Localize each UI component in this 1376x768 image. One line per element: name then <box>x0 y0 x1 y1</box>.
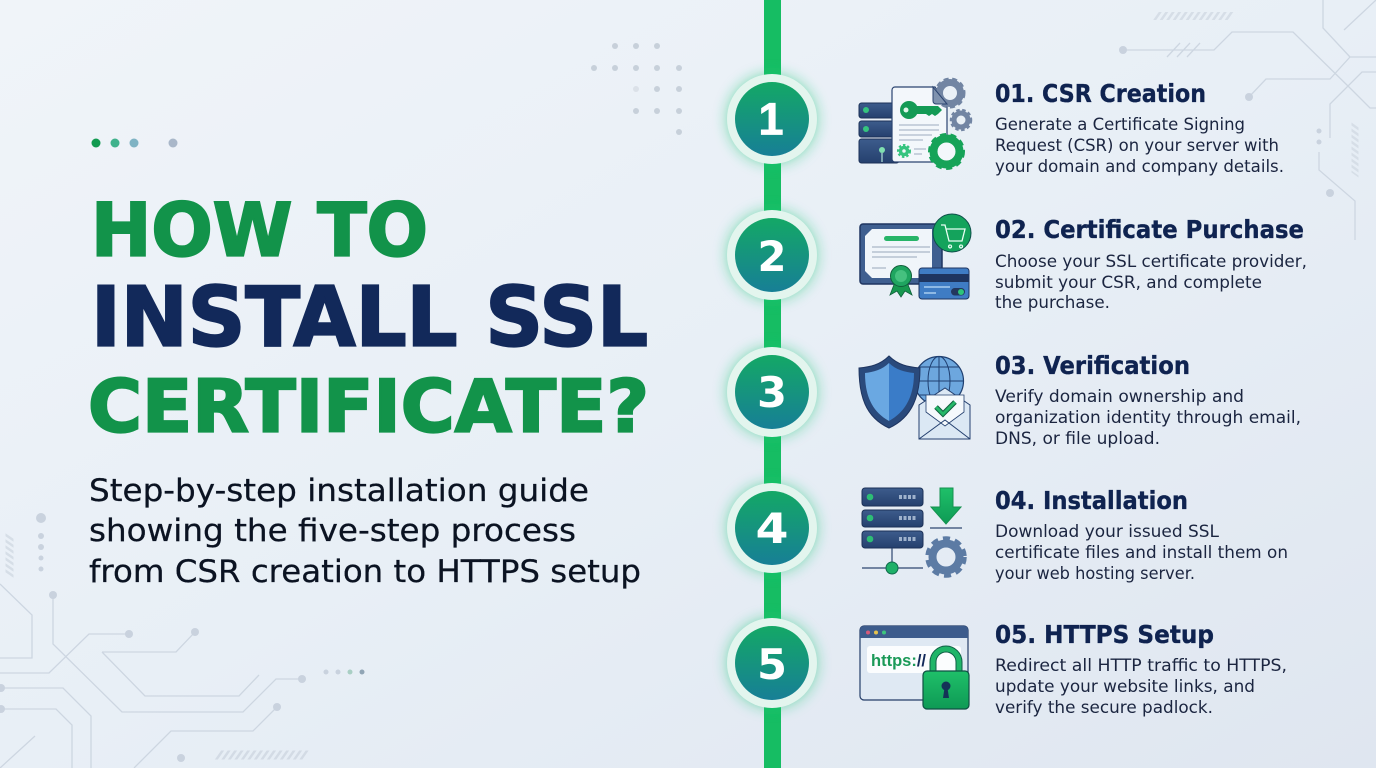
step 4 text: 04. Installation <box>995 486 1188 515</box>
step 1 text: your domain and company details. <box>995 157 1284 177</box>
subtitle: from CSR creation to HTTPS setup <box>89 554 641 590</box>
step 1 text: Request (CSR) on your server with <box>995 136 1279 156</box>
icon: CSR server, document, key and gears <box>859 79 971 168</box>
icon: server, download arrow and gear <box>862 488 964 576</box>
step 5 number <box>727 618 817 708</box>
step 1 number: 1 <box>758 94 784 144</box>
title: CERTIFICATE? <box>88 364 649 448</box>
decoration: top-right circuit <box>1119 0 1376 240</box>
icon: shield, globe and envelope <box>859 356 970 439</box>
icon: browser with https and padlock <box>860 626 969 709</box>
accent dots <box>92 138 178 148</box>
step 2 text: the purchase. <box>995 293 1110 313</box>
title <box>88 188 649 448</box>
step 1 text: Generate a Certificate Signing <box>995 115 1245 135</box>
step 2 number: 2 <box>758 232 786 281</box>
step 5 text <box>995 620 1287 718</box>
step 5 text: update your website links, and <box>995 677 1255 697</box>
step 3 text: organization identity through email, <box>995 408 1301 428</box>
step 4 text: your web hosting server. <box>995 564 1195 584</box>
step 4 number: 4 <box>756 504 788 553</box>
step 1 text: 01. CSR Creation <box>995 79 1206 108</box>
step 1 text <box>995 79 1284 177</box>
step 1 number <box>727 74 817 164</box>
timeline line <box>764 0 781 768</box>
step 3 text <box>995 351 1301 449</box>
subtitle <box>89 473 641 590</box>
step 5 text: Redirect all HTTP traffic to HTTPS, <box>995 656 1287 676</box>
step 4 number <box>727 483 817 573</box>
icon: certificate, cart and card <box>860 214 971 299</box>
icon: browser with https and padlock: https:// <box>871 651 926 670</box>
step 5 text: 05. HTTPS Setup <box>995 620 1214 649</box>
step 4 text: certificate files and install them on <box>995 543 1288 563</box>
step 2 text <box>995 215 1307 313</box>
title: INSTALL SSL <box>91 270 648 366</box>
subtitle: Step-by-step installation guide <box>89 473 589 509</box>
title: HOW TO <box>91 188 428 274</box>
decoration: bottom-left circuit <box>0 0 364 768</box>
step 4 text <box>995 486 1288 584</box>
step 2 text: 02. Certificate Purchase <box>995 215 1304 244</box>
step 3 text: 03. Verification <box>995 351 1190 380</box>
step 3 number: 3 <box>757 368 787 417</box>
step 2 number <box>727 210 817 300</box>
decoration: dot grid <box>591 43 682 135</box>
step 3 text: DNS, or file upload. <box>995 429 1160 449</box>
step 5 number: 5 <box>757 640 787 689</box>
step 2 text: Choose your SSL certificate provider, <box>995 252 1307 272</box>
step 5 text: verify the secure padlock. <box>995 698 1213 718</box>
step 2 text: submit your CSR, and complete <box>995 273 1262 293</box>
step 3 number <box>727 347 817 437</box>
subtitle: showing the five-step process <box>89 513 576 549</box>
step 3 text: Verify domain ownership and <box>995 387 1244 407</box>
step 4 text: Download your issued SSL <box>995 522 1220 542</box>
